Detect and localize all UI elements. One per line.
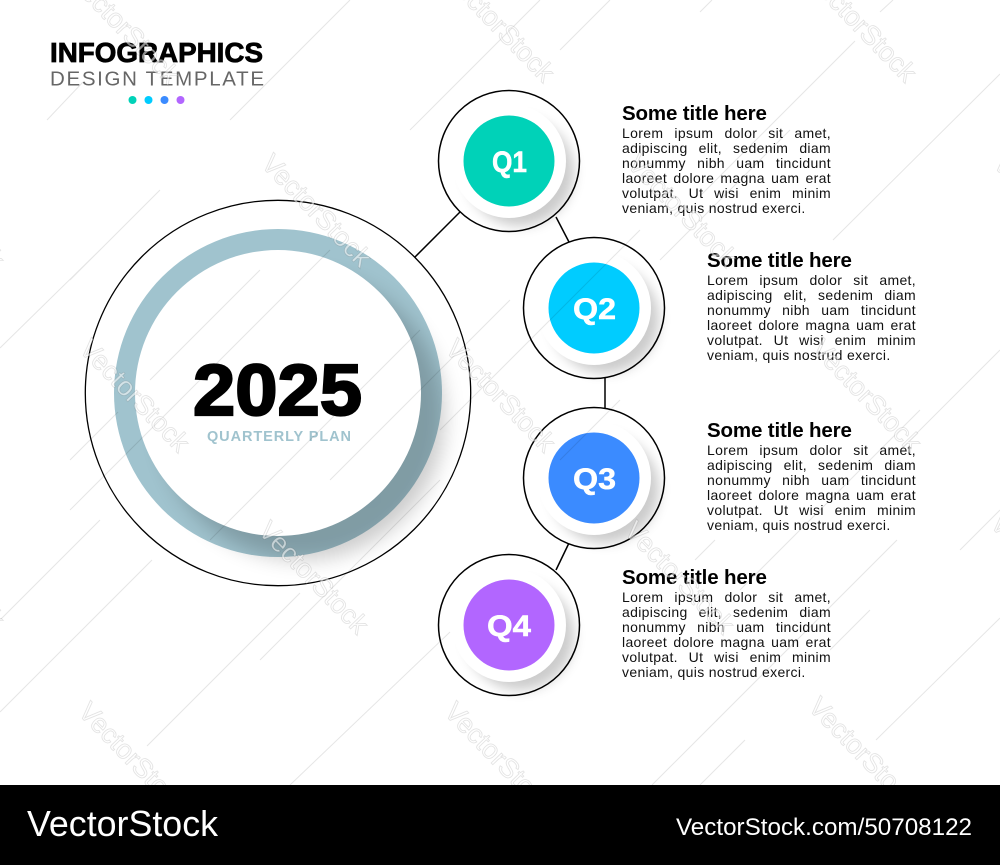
connector: Q1 to Q2 [556,217,569,242]
header: infographics design template [50,37,264,104]
watermark overlay: VectorStock [256,148,378,273]
text block: Q1: adipiscing elit, sedenim diam [622,140,831,156]
heading: INFOGRAPHICS [50,37,263,68]
node: Q1: Q1 [492,146,527,179]
footer url: VectorStock.com/50708122 [676,814,972,841]
text block: Q3: Lorem ipsum dolor sit amet, [707,442,916,458]
text: veniam, quis nostrud exerci. [707,347,891,363]
watermark overlay: VectorStock [440,333,562,458]
text block: Q1: nonummy nibh uam tincidunt [622,155,831,171]
subtitle: QUARTERLY PLAN [207,429,351,445]
node: Q1 [438,90,580,232]
watermark overlay: VectorStock [74,333,196,458]
connector: Q3 to Q4 [556,543,569,570]
text block: Q4: Some title here [622,566,767,589]
main circle: 2025 quarterly plan [85,200,471,586]
main diagram [84,90,666,696]
text block: Q2 [707,249,916,363]
colour dots [128,96,184,104]
node: Q4: Q4 [487,610,531,643]
node: Q2 [524,238,664,378]
footer bar [0,785,1000,865]
text block: Q2: laoreet dolore magna uam erat [707,317,916,333]
connector: main circle to Q1 [415,212,460,257]
text block: Q1: Lorem ipsum dolor sit amet, [622,125,831,141]
watermark overlay: VectorStock [806,333,928,458]
text block: Q4: volutpat. Ut wisi enim minim [622,649,831,665]
text block: Q1: laoreet dolore magna uam erat [622,170,831,186]
text block: Q4: adipiscing elit, sedenim diam [622,604,831,620]
text block: Q3: laoreet dolore magna uam erat [707,487,916,503]
text block: Q2: Some title here [707,249,852,272]
watermark overlay: VectorStock [619,515,741,640]
node: Q4 [438,554,580,696]
text block: Q4: laoreet dolore magna uam erat [622,634,831,650]
watermark overlay: VectorStock [622,148,744,273]
text block: Q3 [707,419,916,533]
text block: Q3: Some title here [707,419,852,442]
text block: Q1 [622,102,831,216]
text block: Q3: volutpat. Ut wisi enim minim [707,502,916,518]
text block: Q1: Some title here [622,102,767,125]
text block: Q2: volutpat. Ut wisi enim minim [707,332,916,348]
node: Q3 [524,408,664,548]
text: veniam, quis nostrud exerci. [622,664,806,680]
text: veniam, quis nostrud exerci. [622,200,806,216]
node: Q3: Q3 [573,463,616,496]
footer logo: VectorStock [27,803,219,844]
node: Q2: Q2 [573,293,616,326]
text: veniam, quis nostrud exerci. [707,517,891,533]
text block: Q3: adipiscing elit, sedenim diam [707,457,916,473]
text block: Q4: nonummy nibh uam tincidunt [622,619,831,635]
year: 2025 [193,351,362,431]
text block: Q2: adipiscing elit, sedenim diam [707,287,916,303]
text block: Q2: nonummy nibh uam tincidunt [707,302,916,318]
connector: Q2 to Q3 [604,378,606,408]
text block: Q4 [622,566,831,680]
watermark overlay: VectorStock [253,515,375,640]
subheading: DESIGN TEMPLATE [50,68,264,90]
text block: Q3: nonummy nibh uam tincidunt [707,472,916,488]
text block: Q4: Lorem ipsum dolor sit amet, [622,589,831,605]
text block: Q2: Lorem ipsum dolor sit amet, [707,272,916,288]
text block: Q1: volutpat. Ut wisi enim minim [622,185,831,201]
